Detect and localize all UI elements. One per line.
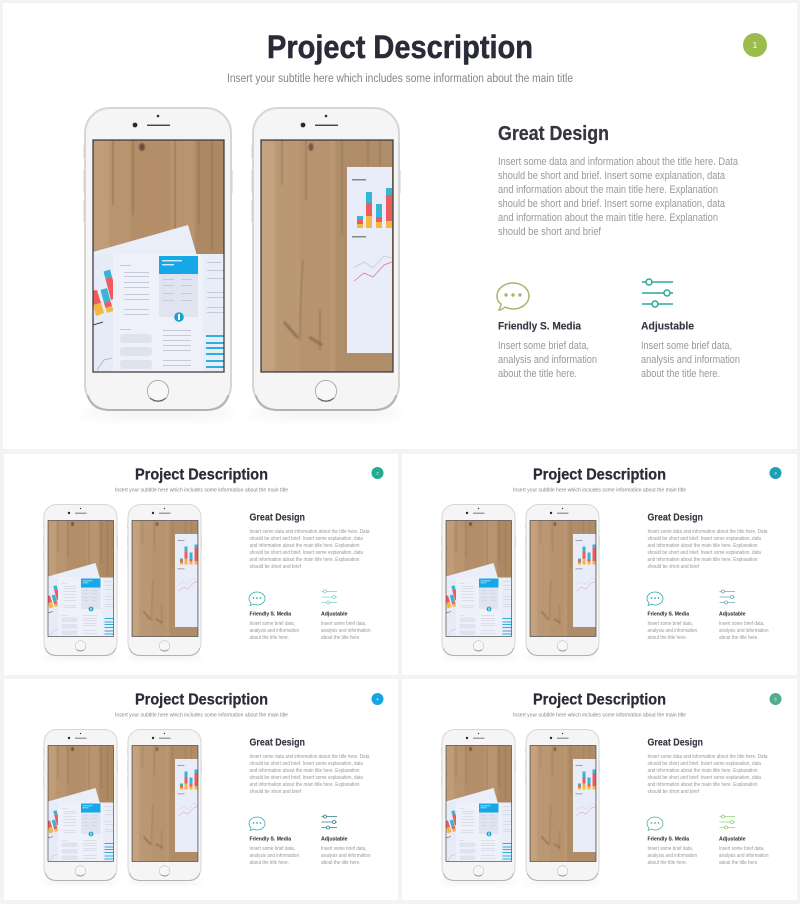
feature: Friendly S. Media: analysis and information	[648, 628, 697, 634]
feature: Adjustable: Adjustable	[321, 836, 348, 842]
heading: Great Design: Great Design	[250, 512, 305, 524]
icon: sliders	[322, 815, 337, 829]
phone mockups	[80, 108, 404, 417]
slide 5: small panel	[440, 692, 782, 884]
feature: Adjustable: Adjustable	[719, 836, 746, 842]
slide 1: large panel	[3, 3, 797, 449]
phone mockups	[42, 504, 204, 659]
page number badge: 4	[376, 696, 379, 702]
body text: and information about the main title here. Explanation	[250, 543, 360, 549]
page number badge	[372, 467, 384, 479]
feature: Adjustable: analysis and information	[719, 853, 769, 859]
page number badge: 5	[774, 696, 777, 702]
subtitle: Insert your subtitle here which includes some information about the main title	[513, 488, 686, 494]
panel background: slide 2	[4, 454, 398, 675]
page number badge	[770, 693, 782, 705]
feature: Adjustable: analysis and information	[321, 628, 371, 634]
icon: sliders	[642, 279, 673, 307]
page number badge	[372, 693, 384, 705]
panel background	[3, 3, 797, 449]
body text: and information about the main title here. Explanation	[250, 557, 360, 563]
heading: Great Design: Great Design	[648, 512, 703, 524]
body text: should be short and brief. Insert some explanation, data	[250, 761, 363, 767]
body text	[648, 529, 768, 570]
feature: Adjustable: about the title here.	[321, 860, 360, 866]
feature: Friendly S. Media	[250, 836, 299, 866]
feature: Adjustable	[719, 836, 769, 866]
feature: Friendly S. Media: analysis and information	[648, 853, 697, 859]
feature: Friendly S. Media: analysis and information	[250, 628, 299, 634]
feature: Friendly S. Media	[648, 611, 697, 641]
phone mockups	[440, 504, 602, 659]
title: Project Description	[533, 692, 666, 708]
feature: Friendly S. Media: about the title here.	[648, 860, 687, 866]
feature: Adjustable: about the title here.	[719, 860, 758, 866]
body text: should be short and brief. Insert some explanation, data	[498, 170, 725, 182]
body text: and information about the main title here. Explanation	[250, 768, 360, 774]
body text: should be short and brief	[498, 226, 601, 238]
heading: Great Design: Great Design	[498, 123, 609, 145]
icon: chat bubble	[249, 817, 265, 830]
icon: chat bubble	[647, 592, 663, 606]
body text: should be short and brief. Insert some explanation, data	[648, 761, 761, 767]
panel background: slide 5	[402, 679, 797, 900]
slide 4: small panel	[42, 692, 384, 884]
slide 3: small panel	[440, 466, 782, 659]
body text: and information about the main title here. Explanation	[498, 212, 718, 224]
feature: Adjustable	[321, 836, 371, 866]
body text	[250, 754, 370, 795]
phone mockups	[42, 730, 204, 884]
body text	[498, 156, 738, 238]
feature: Friendly S. Media: analysis and information	[250, 853, 299, 859]
feature: Adjustable: Insert some brief data,	[719, 621, 764, 627]
feature: Adjustable: Adjustable	[641, 320, 694, 332]
body text: and information about the main title here. Explanation	[648, 543, 758, 549]
feature: Adjustable	[641, 320, 740, 380]
icon: chat bubble	[249, 592, 265, 606]
slide 2: small panel	[42, 466, 384, 659]
body text: should be short and brief. Insert some explanation, data	[648, 550, 761, 556]
panel background: slide 3	[402, 454, 797, 675]
body text: Insert some data and information about the title here. Data	[250, 754, 370, 760]
feature: Adjustable: about the title here.	[641, 368, 720, 380]
icon: sliders	[720, 815, 735, 829]
panel background: slide 4	[4, 679, 398, 900]
body text: should be short and brief. Insert some explanation, data	[250, 536, 363, 542]
feature: Adjustable	[719, 611, 769, 641]
subtitle: Insert your subtitle here which includes some information about the main title	[115, 712, 288, 718]
body text: Insert some data and information about the title here. Data	[498, 156, 738, 168]
feature: Adjustable: analysis and information	[641, 354, 740, 366]
feature: Friendly S. Media: about the title here.	[250, 635, 289, 641]
body text: should be short and brief	[648, 789, 699, 795]
feature: Friendly S. Media: Friendly S. Media	[648, 836, 690, 842]
title: Project Description	[135, 692, 268, 708]
subtitle: Insert your subtitle here which includes some information about the main title	[227, 73, 573, 85]
subtitle: Insert your subtitle here which includes some information about the main title	[513, 712, 686, 718]
feature: Adjustable	[321, 611, 371, 641]
feature: Adjustable: about the title here.	[719, 635, 758, 641]
feature: Friendly S. Media: about the title here.	[498, 368, 577, 380]
icon: chat bubble	[497, 283, 529, 310]
feature: Friendly S. Media: Friendly S. Media	[648, 611, 690, 617]
feature: Friendly S. Media: Friendly S. Media	[250, 611, 292, 617]
body text: should be short and brief. Insert some explanation, data	[648, 536, 761, 542]
body text: should be short and brief. Insert some explanation, data	[498, 198, 725, 210]
feature: Friendly S. Media	[498, 320, 597, 380]
page number badge: 1	[753, 41, 758, 50]
icon: chat bubble	[647, 817, 663, 830]
feature: Adjustable: Insert some brief data,	[321, 846, 366, 852]
feature: Friendly S. Media: Insert some brief data,	[250, 846, 295, 852]
feature: Adjustable: analysis and information	[321, 853, 371, 859]
page number badge: 3	[774, 470, 777, 476]
feature: Adjustable: Insert some brief data,	[719, 846, 764, 852]
heading: Great Design: Great Design	[250, 738, 305, 748]
body text: should be short and brief. Insert some explanation, data	[250, 775, 363, 781]
feature: Friendly S. Media: about the title here.	[648, 635, 687, 641]
title: Project Description	[533, 466, 666, 484]
body text: and information about the main title here. Explanation	[648, 768, 758, 774]
feature: Adjustable: Insert some brief data,	[321, 621, 366, 627]
body text: Insert some data and information about the title here. Data	[648, 529, 768, 535]
body text: and information about the main title here. Explanation	[648, 557, 758, 563]
icon: sliders	[322, 590, 337, 604]
feature: Friendly S. Media: about the title here.	[250, 860, 289, 866]
feature: Friendly S. Media	[250, 611, 299, 641]
feature: Friendly S. Media: Insert some brief data,	[498, 340, 589, 352]
feature: Friendly S. Media: Friendly S. Media	[498, 320, 582, 332]
phone mockups	[440, 730, 602, 884]
feature: Adjustable: Adjustable	[719, 611, 746, 617]
body text: should be short and brief	[250, 564, 301, 570]
heading: Great Design: Great Design	[648, 738, 703, 748]
title: Project Description	[267, 29, 533, 65]
body text: should be short and brief	[250, 789, 301, 795]
feature: Friendly S. Media: Insert some brief data,	[250, 621, 295, 627]
feature: Friendly S. Media: Insert some brief data,	[648, 846, 693, 852]
body text: Insert some data and information about the title here. Data	[250, 529, 370, 535]
feature: Adjustable: analysis and information	[719, 628, 769, 634]
body text: should be short and brief	[648, 564, 699, 570]
body text: and information about the main title here. Explanation	[648, 782, 758, 788]
subtitle: Insert your subtitle here which includes some information about the main title	[115, 488, 288, 494]
feature: Adjustable: Insert some brief data,	[641, 340, 732, 352]
page number badge	[770, 467, 782, 479]
icon: sliders	[720, 590, 735, 604]
title: Project Description	[135, 466, 268, 484]
feature: Friendly S. Media: Friendly S. Media	[250, 836, 292, 842]
body text	[250, 529, 370, 570]
feature: Friendly S. Media	[648, 836, 697, 866]
body text: should be short and brief. Insert some explanation, data	[250, 550, 363, 556]
body text: should be short and brief. Insert some explanation, data	[648, 775, 761, 781]
body text: and information about the main title here. Explanation	[250, 782, 360, 788]
page number badge: 2	[376, 470, 379, 476]
feature: Adjustable: Adjustable	[321, 611, 348, 617]
body text: and information about the main title here. Explanation	[498, 184, 718, 196]
feature: Adjustable: about the title here.	[321, 635, 360, 641]
body text: Insert some data and information about the title here. Data	[648, 754, 768, 760]
body text	[648, 754, 768, 795]
feature: Friendly S. Media: analysis and information	[498, 354, 597, 366]
feature: Friendly S. Media: Insert some brief data,	[648, 621, 693, 627]
page number badge	[743, 33, 767, 57]
